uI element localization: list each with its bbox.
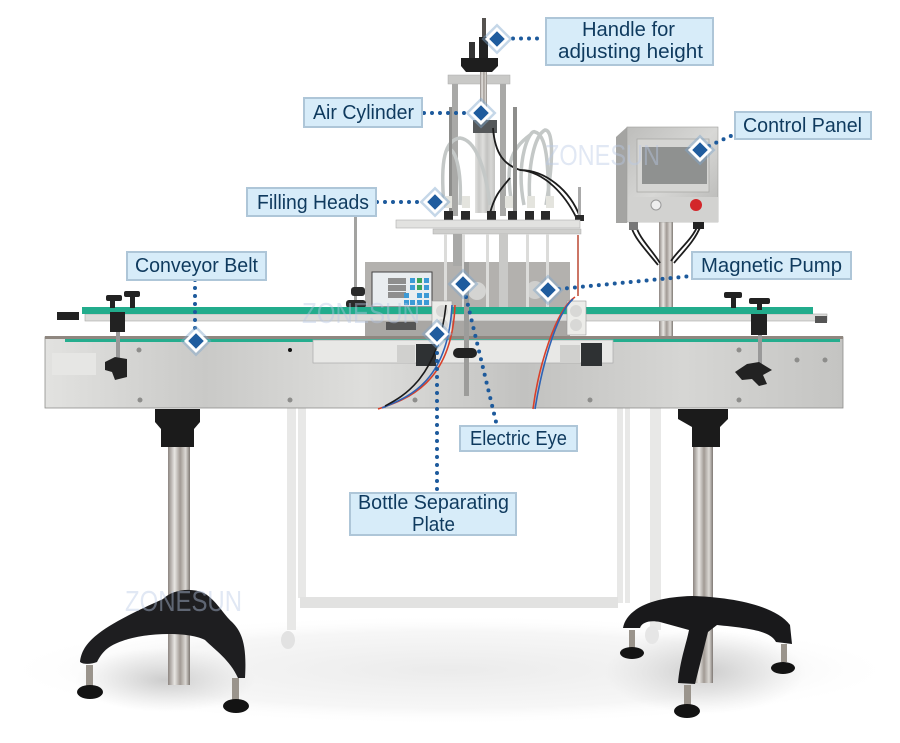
label: bottle separating plate: Plate — [412, 514, 455, 536]
label: handle for adjusting height — [546, 18, 713, 65]
right support leg — [620, 409, 795, 718]
sensor wires — [378, 235, 578, 409]
marker: conveyor belt — [180, 325, 212, 357]
marker: bottle separating plate — [421, 318, 453, 350]
label: handle for adjusting height: adjusting height — [558, 41, 703, 63]
label: electric eye: Electric Eye — [470, 428, 567, 450]
label: control panel: Control Panel — [743, 115, 862, 137]
label: air cylinder: Air Cylinder — [313, 102, 414, 124]
ghosted rear frame — [281, 408, 661, 649]
leader lines — [195, 38, 735, 493]
watermark text: ZONESUN — [302, 298, 420, 330]
watermark text: ZONESUN — [545, 140, 660, 172]
pump housing with keypad — [346, 213, 570, 332]
label: bottle separating plate: Bottle Separating — [358, 492, 509, 514]
label: bottle separating plate — [350, 492, 516, 536]
rail clamps and knobs — [105, 291, 772, 386]
left support leg — [77, 409, 249, 713]
label: magnetic pump: Magnetic Pump — [701, 255, 842, 277]
watermark text — [125, 140, 660, 618]
marker: filling heads — [419, 186, 451, 218]
back conveyor rail — [57, 222, 827, 338]
marker: handle — [481, 23, 513, 55]
floor shadows — [0, 615, 900, 725]
label: filling heads: Filling Heads — [257, 192, 369, 214]
label: handle for adjusting height: Handle for — [582, 19, 675, 41]
label: conveyor belt: Conveyor Belt — [135, 255, 258, 277]
marker: air cylinder — [465, 97, 497, 129]
marker: electric eye — [447, 268, 479, 300]
control panel unit — [616, 127, 718, 265]
label: air cylinder — [304, 98, 422, 127]
filling head assembly — [396, 18, 584, 234]
marker: control panel — [684, 134, 716, 166]
conveyor body — [45, 262, 843, 408]
marker: magnetic pump — [532, 274, 564, 306]
watermark text: ZONESUN — [125, 586, 242, 618]
